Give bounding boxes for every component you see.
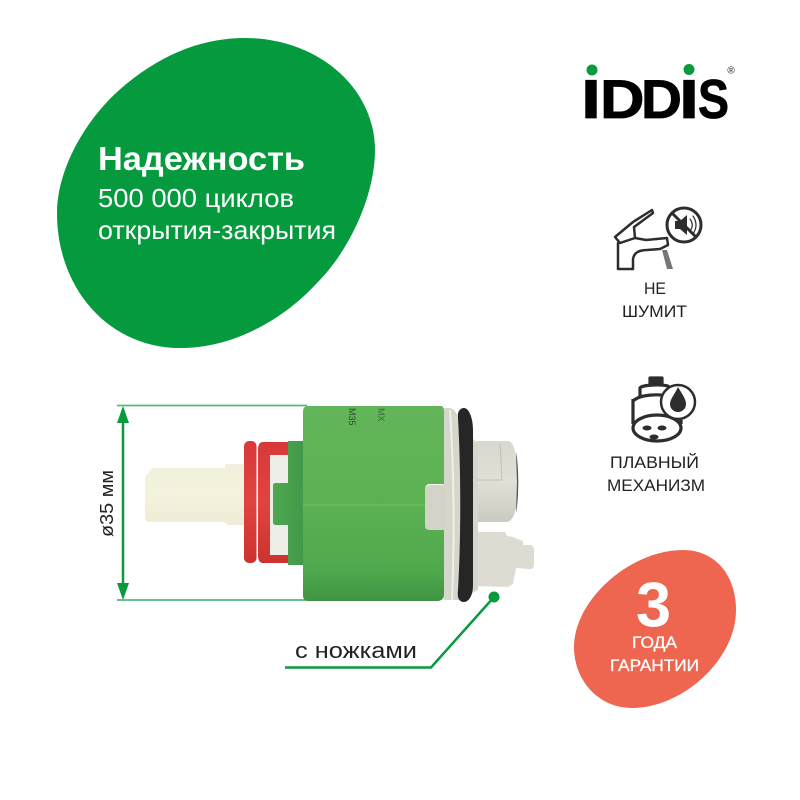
logo: IDDIS: S — [698, 68, 729, 130]
label: smooth mechanism — [607, 453, 705, 495]
logo: IDDIS — [581, 64, 735, 130]
label: smooth mechanism: ПЛАВНЫЙ — [610, 453, 699, 472]
logo: IDDIS: I — [679, 68, 699, 130]
green body — [303, 406, 444, 601]
heading: reliability: Надежность — [98, 140, 305, 177]
grey flange — [442, 408, 478, 600]
logo: IDDIS: D — [641, 68, 682, 130]
label: not noisy: НЕ — [644, 279, 666, 298]
callout: with legs: с ножками — [295, 638, 417, 663]
body markings: M35 — [347, 408, 357, 426]
logo: IDDIS: ® — [727, 66, 735, 76]
icon: smooth mechanism — [633, 378, 695, 441]
text: years of warranty — [610, 633, 699, 675]
label: second line: МЕХАНИЗМ — [607, 476, 705, 495]
icon: quiet faucet — [615, 208, 701, 269]
text: years of warranty: ГОДА — [632, 633, 678, 652]
label: not noisy — [622, 279, 687, 321]
logo: IDDIS: I — [581, 68, 601, 130]
white core — [270, 455, 288, 555]
dimension: 35 mm diameter — [96, 406, 307, 600]
red rings — [244, 441, 256, 563]
callout: with legs — [285, 592, 500, 668]
label: second line: ШУМИТ — [622, 302, 687, 321]
stem — [145, 464, 244, 525]
text: cycles count: 500 000 циклов — [98, 183, 294, 213]
number: 3: 3 — [636, 570, 671, 640]
text: open-close: открытия-закрытия — [98, 215, 336, 245]
green neck — [273, 441, 303, 565]
panel: reliability green blob — [57, 38, 375, 348]
product: cartridge — [145, 406, 534, 602]
text: warranty: ГАРАНТИИ — [610, 656, 699, 675]
lower foot — [473, 532, 534, 587]
rubber o-ring — [458, 408, 473, 602]
panel: warranty badge — [574, 550, 736, 708]
dimension: 35 mm diameter: ø35 мм — [96, 470, 117, 537]
product: cartridge: MX — [376, 408, 386, 422]
logo: IDDIS: D — [600, 68, 644, 130]
top knob — [476, 441, 518, 522]
grey latch — [425, 485, 445, 530]
